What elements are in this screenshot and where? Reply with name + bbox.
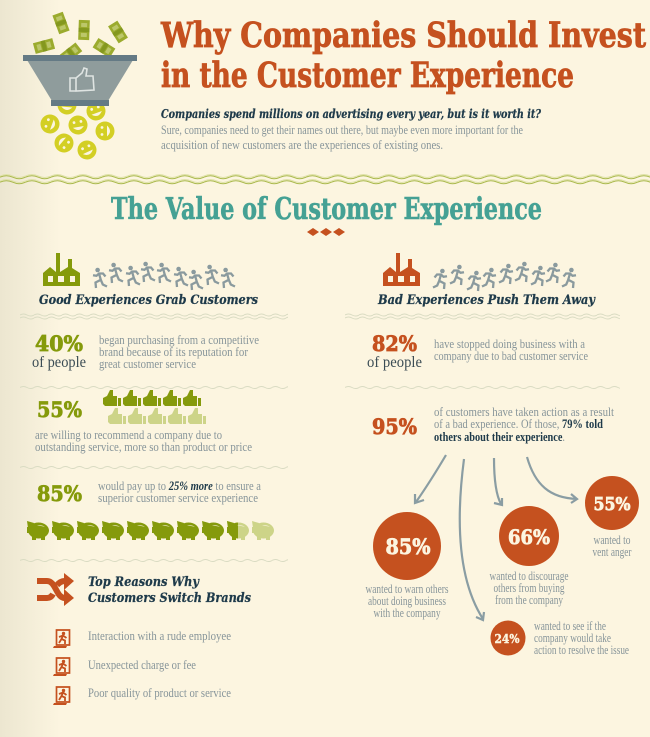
stat: 55 percent: outstanding service, more so than product or price	[35, 440, 252, 454]
stat: 95 percent: others about their experience.	[434, 430, 565, 444]
outcome: 66 percent discourage others	[490, 506, 569, 607]
outcome: 85 percent warn others: with the company	[374, 606, 441, 620]
icon: shuffle arrows	[37, 573, 74, 606]
outcome: 55 percent vent anger	[585, 476, 639, 559]
intro text: Sure, companies need to get their names out there, but maybe even more important for the	[161, 123, 523, 137]
stat: 95 percent: 95%	[372, 414, 417, 439]
outcome: 55 percent vent anger: 55%	[594, 494, 630, 515]
stat: 40 percent: began purchasing from a competitive	[99, 333, 259, 347]
stat: 95 percent: of customers have taken action as a result	[434, 405, 614, 419]
stat: 82 percent: have stopped doing business with a	[434, 337, 585, 351]
icon row: thumbs up	[103, 390, 206, 424]
stat: 40 percent: great customer service	[99, 357, 196, 371]
outcome: 66 percent discourage others: 66%	[508, 525, 550, 549]
icon row: piggy banks	[27, 521, 274, 540]
stat: 82 percent: of people	[367, 354, 422, 371]
outcome: 85 percent warn others: about doing business	[368, 594, 446, 608]
stat: 55 percent: 55%	[37, 397, 82, 422]
outcome: 66 percent discourage others: wanted to discourage	[490, 569, 569, 583]
stat: 55 percent: are willing to recommend a company due to	[35, 428, 222, 442]
money falling into funnel	[33, 12, 128, 63]
icon: customers running away	[433, 262, 576, 291]
intro text: acquisition of new customers are the experiences of existing ones.	[161, 138, 443, 152]
outcome: 66 percent discourage others: from the company	[495, 593, 564, 607]
icon: orange factory	[383, 253, 420, 286]
heading: good experiences: Good Experiences Grab Customers	[39, 293, 259, 308]
outcome: 85 percent warn others: wanted to warn others	[366, 582, 449, 596]
stat: 95 percent	[372, 405, 614, 444]
icon: green factory	[43, 253, 80, 286]
reason: rude employee: Interaction with a rude employee	[88, 629, 231, 643]
heading: bad experiences: Bad Experiences Push Them Away	[377, 293, 596, 308]
outcome: 24 percent see if company acts: 24%	[494, 631, 520, 646]
stat: 82 percent: 82%	[372, 331, 417, 356]
outcome: 66 percent discourage others: others from buying	[494, 581, 565, 595]
outcome: 85 percent warn others	[366, 512, 449, 620]
outcome: 24 percent see if company acts: company would take	[534, 631, 611, 645]
stat: 40 percent	[32, 331, 259, 371]
stat: 85 percent: would pay up to 25% more to ensure a	[98, 479, 261, 493]
stat: 40 percent: 40%	[35, 331, 83, 356]
stat: 82 percent: company due to bad customer service	[434, 349, 588, 363]
icon: thumbs up	[70, 68, 94, 91]
stat: 85 percent	[37, 479, 261, 506]
intro text	[161, 107, 542, 152]
icon: funnel turning money into smiles	[23, 12, 137, 163]
panel: good experiences	[27, 253, 274, 540]
reason: poor quality: Poor quality of product or service	[88, 686, 231, 700]
wave dividers	[20, 313, 620, 564]
outcome: 24 percent see if company acts	[490, 619, 629, 657]
reason: unexpected charge: Unexpected charge or fee	[88, 658, 196, 672]
reason: poor quality	[53, 686, 231, 705]
stat: 40 percent: brand because of its reputation for	[99, 345, 249, 359]
stat: 95 percent: of a bad experience. Of those, 79% told	[434, 417, 603, 431]
stat: 82 percent	[367, 331, 588, 371]
funnel body	[23, 55, 137, 106]
reason: unexpected charge	[53, 658, 196, 676]
outcome: 55 percent vent anger: wanted to	[594, 533, 630, 547]
panel: bad experiences	[366, 253, 639, 657]
arrows to outcomes	[415, 455, 577, 620]
intro text: Companies spend millions on advertising every year, but is it worth it?	[161, 107, 542, 121]
smiley faces falling from funnel	[38, 95, 114, 163]
stat: 85 percent: superior customer service experience	[98, 491, 258, 505]
heading: top reasons: Top Reasons Why	[88, 575, 200, 590]
outcome: 85 percent warn others: 85%	[386, 534, 431, 559]
outcome: 55 percent vent anger: vent anger	[592, 545, 632, 559]
stat: 55 percent	[35, 390, 252, 454]
stat: 85 percent: 85%	[37, 481, 82, 506]
outcome: 24 percent see if company acts: wanted to see if the	[534, 619, 606, 633]
icon: customers running to factory	[93, 262, 235, 290]
heading: top reasons: Customers Switch Brands	[88, 591, 252, 606]
title	[160, 15, 646, 96]
panel: top reasons customers switch brands	[37, 573, 252, 705]
heading: top reasons	[88, 575, 252, 606]
diamonds ornament	[307, 228, 345, 236]
double wave divider	[0, 173, 650, 185]
reason: rude employee	[53, 629, 231, 648]
stat: 40 percent: of people	[32, 354, 86, 371]
